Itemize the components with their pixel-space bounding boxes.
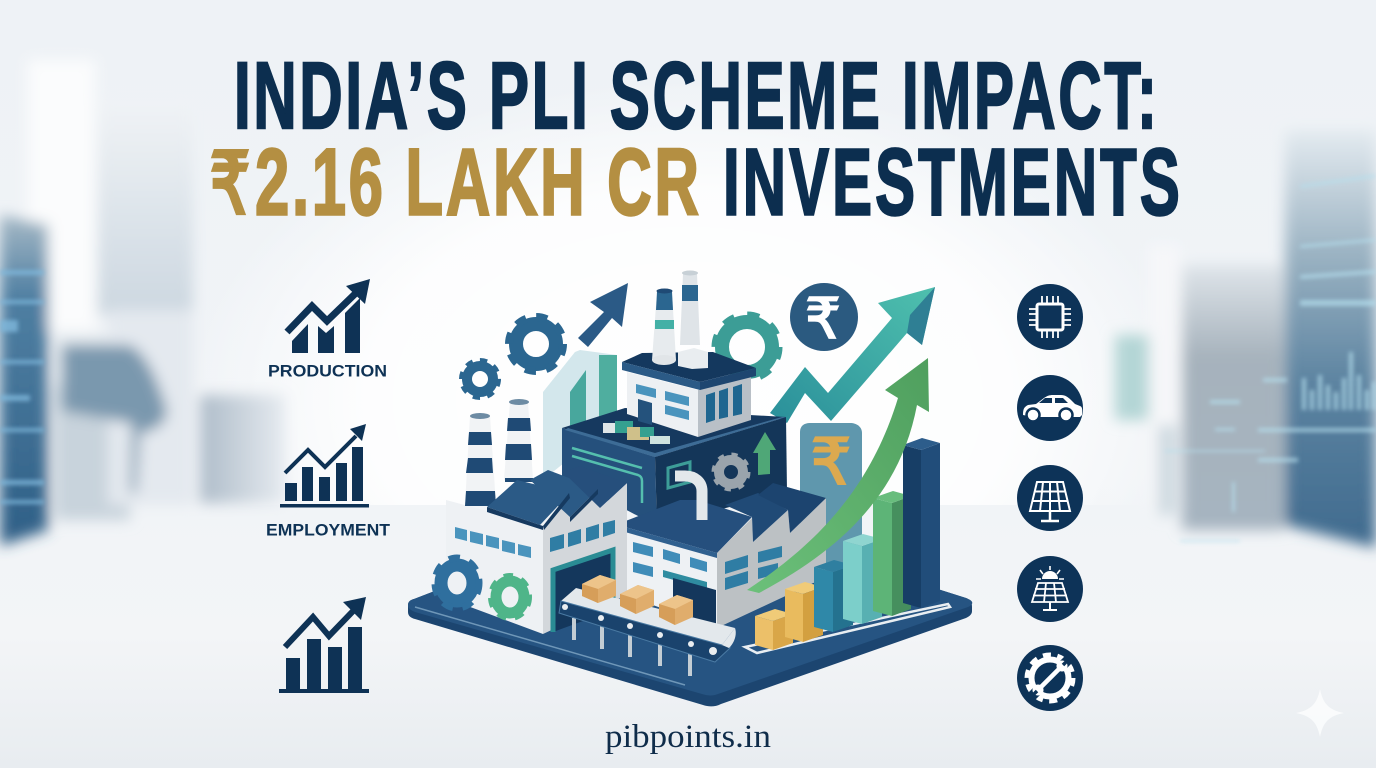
icon: rupee coin <box>790 283 858 351</box>
icon: gear and wrench <box>1017 645 1083 711</box>
arrow: blue up arrow <box>578 283 628 347</box>
bar: gold small <box>755 609 793 650</box>
loading door <box>553 550 613 632</box>
white pipe <box>675 476 702 520</box>
icon: blue gear front <box>435 558 479 608</box>
icon: production chart <box>287 279 370 353</box>
striped ribbon behind factory <box>543 350 617 480</box>
middle dark block <box>562 408 787 526</box>
chimney striped left <box>465 413 496 506</box>
right column: sector icons <box>1017 284 1083 711</box>
label: employment: EMPLOYMENT <box>266 522 390 540</box>
icon: teal gear behind factory <box>715 315 779 379</box>
cardboard boxes <box>582 575 693 625</box>
title line 2: investments: INVESTMENTS <box>723 128 1180 235</box>
teal rising arrow <box>770 287 935 423</box>
icon: rupee coin: ₹ <box>805 287 841 350</box>
upper building <box>622 352 756 437</box>
chimneys on upper building <box>652 270 708 369</box>
icon: growth chart <box>279 597 369 693</box>
machinery on roof <box>603 421 670 444</box>
icon: car <box>1017 375 1083 441</box>
label: production: PRODUCTION <box>268 362 387 380</box>
website label: pibpoints.in <box>605 719 771 755</box>
platform <box>408 572 972 706</box>
left column: metric icons <box>266 279 390 693</box>
icon: grey gear on block <box>714 455 748 489</box>
icon: employment chart <box>280 424 369 508</box>
bar: blue <box>814 560 853 632</box>
icon: gear large <box>509 317 563 371</box>
icon: solar panel <box>1017 465 1083 531</box>
icon: microchip <box>1017 284 1083 350</box>
title <box>210 42 1180 235</box>
bar: navy <box>903 438 940 608</box>
green rising arrow <box>747 358 929 593</box>
arrow: small green up <box>753 432 776 475</box>
windows <box>455 527 531 558</box>
title line 2: gold amount: 2.16 LAKH CR <box>255 128 699 235</box>
icon: sun and solar panel <box>1017 556 1083 622</box>
icon: green gear front <box>491 576 529 618</box>
central factory illustration <box>408 270 972 706</box>
bar: light teal <box>843 534 882 624</box>
title line 1: INDIA’S PLI SCHEME IMPACT: <box>234 42 1157 148</box>
icon: sparkle watermark <box>1296 689 1344 737</box>
lower right building <box>623 476 826 628</box>
left building <box>446 399 627 634</box>
rupee card <box>800 423 862 583</box>
rollers <box>562 604 694 647</box>
conveyor belt <box>559 588 736 676</box>
title line 2: rupee symbol: ₹ <box>210 137 250 232</box>
chimney striped right <box>504 399 533 482</box>
bar: gold medium <box>785 582 823 642</box>
bar chart <box>755 438 940 650</box>
rupee card: ₹ <box>811 426 851 498</box>
bar: green <box>873 491 911 616</box>
teal awning and dark door <box>663 570 716 625</box>
icon: gear small <box>462 361 498 397</box>
